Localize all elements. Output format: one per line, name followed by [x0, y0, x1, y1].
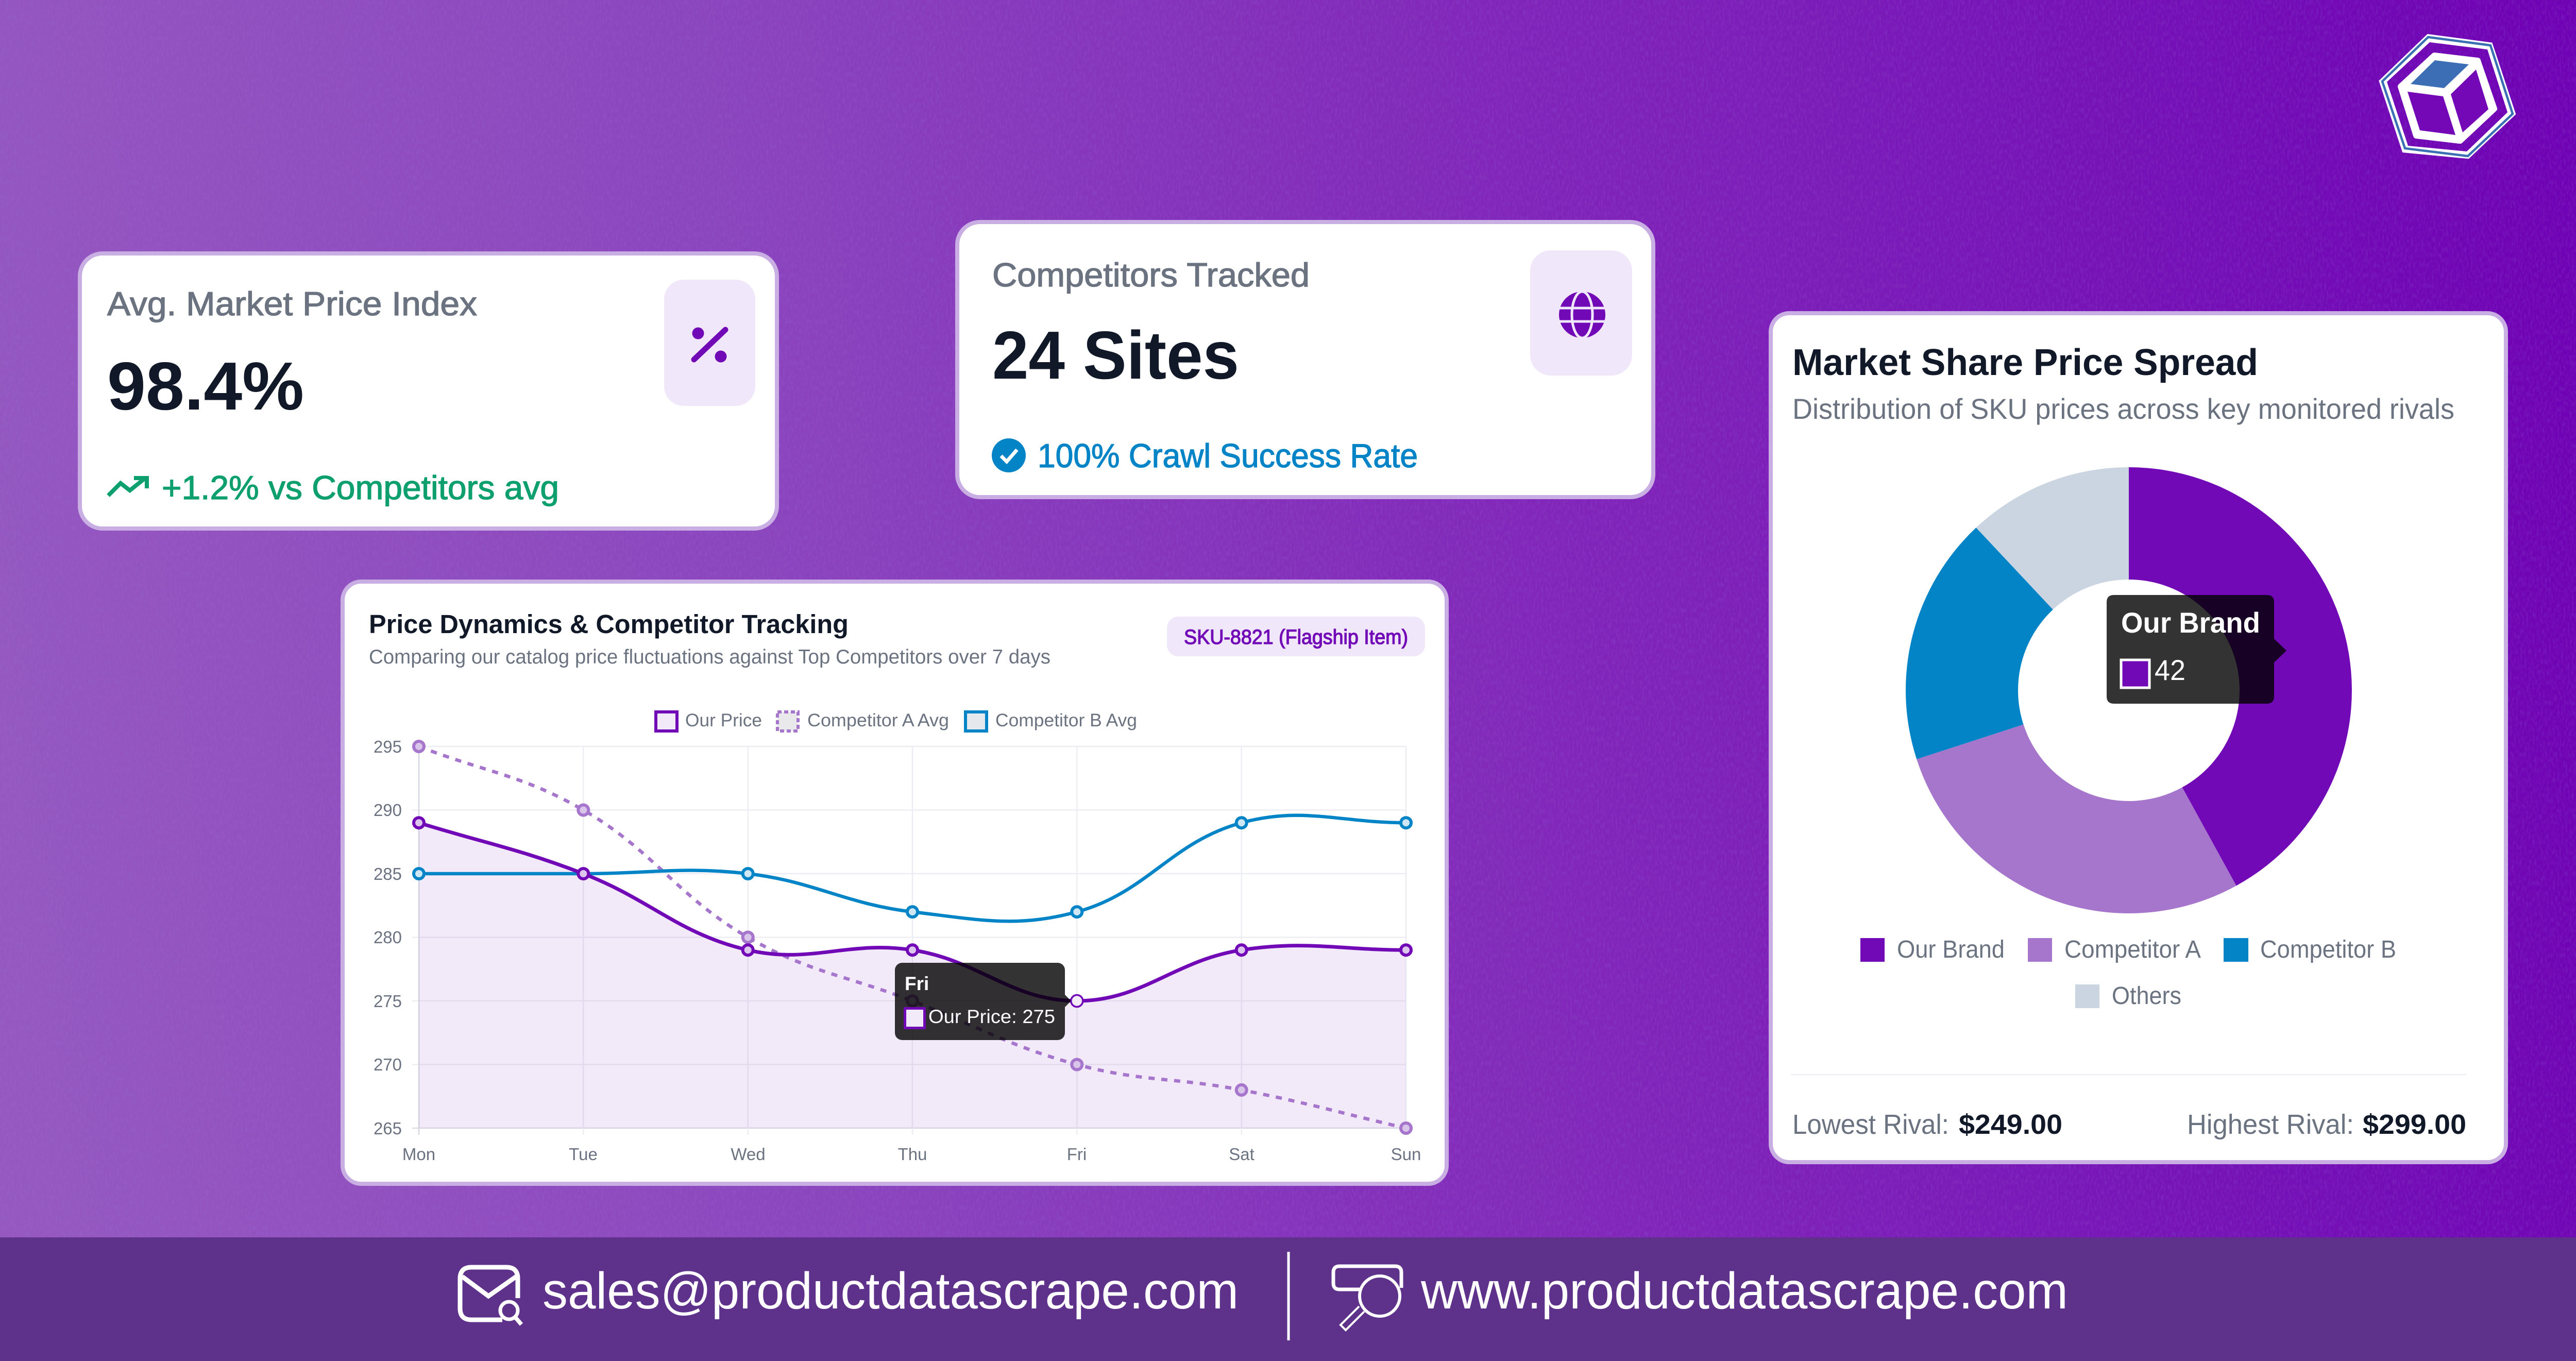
trend text: +1.2% vs Competitors avg: [162, 469, 559, 506]
donut legend: Competitor A: [2064, 936, 2201, 963]
y axis labels: 290: [374, 801, 402, 820]
panel: average market price index: [80, 253, 777, 529]
x axis labels: Sun: [1391, 1145, 1421, 1164]
website text: www.productdatascrape.com: [1420, 1262, 2068, 1320]
chart subtitle: Comparing our catalog price fluctuations against Top Competitors over 7 days: [369, 646, 1050, 668]
footer bar: [0, 1237, 2576, 1361]
y axis labels: 275: [374, 992, 402, 1011]
email text: sales@productdatascrape.com: [543, 1262, 1239, 1320]
y axis labels: [374, 737, 402, 1138]
icon: web search: [1333, 1266, 1401, 1330]
panel: market share donut: [1771, 313, 2506, 1162]
donut legend: Others: [2112, 982, 2181, 1010]
series: our price: [414, 818, 1411, 1007]
price range stats: $249.00: [1959, 1109, 2062, 1140]
chart legend: Competitor A Avg: [807, 710, 949, 730]
icon: percent tile: [664, 280, 755, 406]
donut chart: [1906, 467, 2352, 913]
chart legend: Competitor B Avg: [995, 710, 1137, 730]
series: competitor A: [414, 741, 1411, 1133]
donut legend: Competitor B: [2260, 936, 2396, 963]
crawl success text: 100% Crawl Success Rate: [1038, 437, 1418, 474]
chart legend: [656, 710, 1137, 731]
icon: trend up arrow: [108, 478, 147, 496]
tooltip: friday: [895, 963, 1071, 1040]
label: avg market price index: Avg. Market Price Index: [107, 285, 477, 322]
value: 24 sites: 24 Sites: [992, 317, 1239, 393]
divider: [1287, 1252, 1290, 1340]
x axis labels: Sat: [1229, 1145, 1255, 1164]
icon: check circle: [992, 438, 1026, 472]
tooltip: our brand: [2107, 595, 2286, 704]
series: competitor B: [414, 815, 1411, 921]
value: 98.4%: 98.4%: [107, 348, 304, 424]
x axis labels: Wed: [731, 1145, 766, 1164]
x axis labels: Fri: [1067, 1145, 1087, 1164]
y axis labels: 270: [374, 1055, 402, 1074]
price range stats: [1792, 1109, 2466, 1140]
x axis labels: Tue: [569, 1145, 598, 1164]
tooltip: friday: Our Price: 275: [928, 1006, 1055, 1027]
y axis labels: 280: [374, 928, 402, 947]
label: competitors tracked: Competitors Tracked: [992, 256, 1310, 294]
donut subtitle: Distribution of SKU prices across key monitored rivals: [1792, 393, 2454, 425]
price range stats: $299.00: [2363, 1109, 2466, 1140]
donut title: Market Share Price Spread: [1792, 342, 2258, 383]
tooltip: our brand: Our Brand: [2121, 606, 2260, 639]
donut legend: Our Brand: [1897, 936, 2005, 963]
grid: [412, 746, 1406, 1135]
donut legend: [1860, 936, 2396, 1010]
x axis labels: Mon: [402, 1145, 435, 1164]
chart title: Price Dynamics & Competitor Tracking: [369, 609, 849, 639]
panel: competitors tracked: [957, 222, 1653, 497]
badge: SKU: [1167, 617, 1425, 656]
logo: hexagonal cube: [2379, 34, 2516, 159]
price range stats: Lowest Rival:: [1792, 1109, 1949, 1140]
price range stats: Highest Rival:: [2187, 1109, 2354, 1140]
chart legend: Our Price: [685, 710, 762, 730]
icon: mail: [460, 1267, 521, 1324]
series: our price area: [419, 823, 1406, 1128]
badge: SKU: SKU-8821 (Flagship Item): [1184, 626, 1408, 649]
x axis labels: Thu: [898, 1145, 927, 1164]
panel: price dynamics line chart: [343, 582, 1447, 1184]
y axis labels: 295: [374, 737, 402, 756]
icon: globe tile: [1530, 250, 1632, 376]
tooltip: our brand: 42: [2155, 654, 2185, 686]
y axis labels: 265: [374, 1119, 402, 1138]
y axis labels: 285: [374, 864, 402, 883]
x axis labels: [402, 1145, 1421, 1164]
tooltip: friday: Fri: [905, 973, 929, 994]
